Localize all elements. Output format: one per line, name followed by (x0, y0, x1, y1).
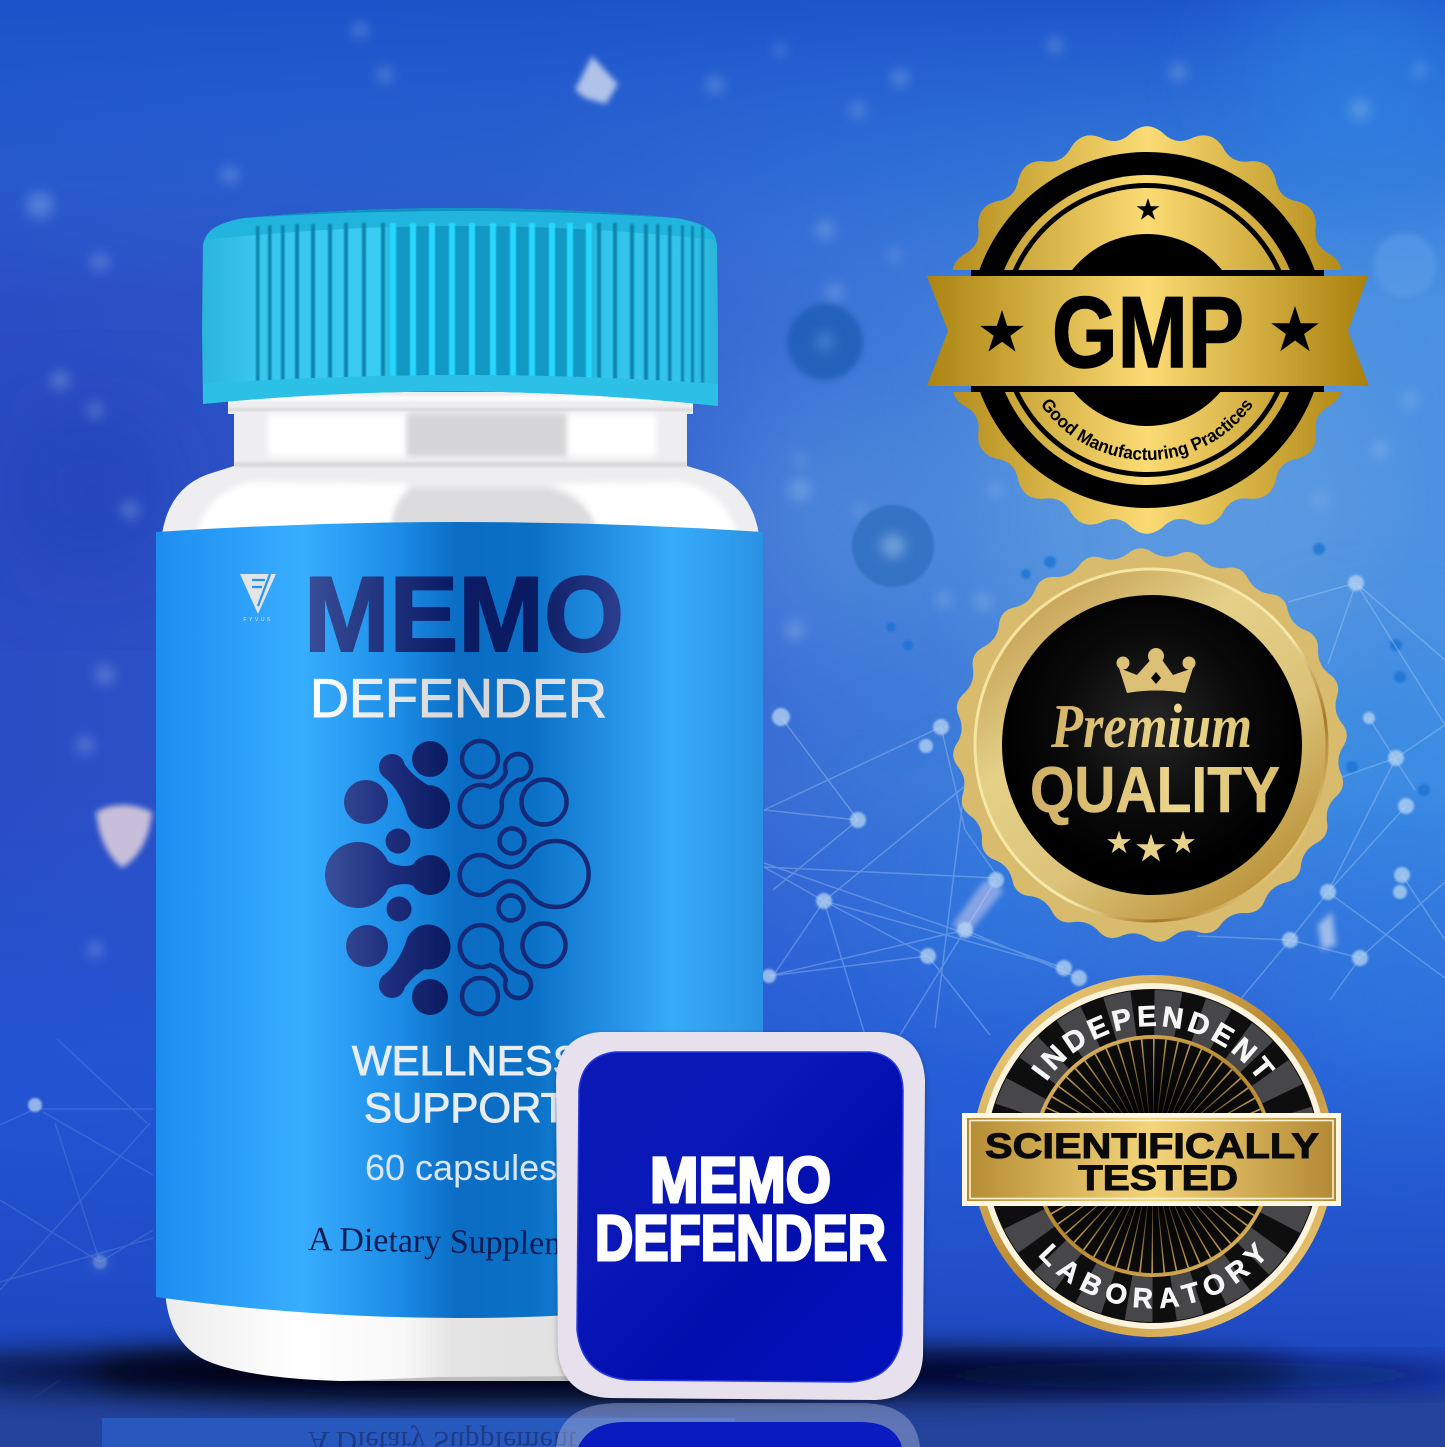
label text: dietary supplement: A Dietary Supplement (308, 1221, 613, 1263)
light shards (96, 56, 1336, 950)
reflection of bottle and box on the floor (102, 1403, 920, 1447)
decorative side grooves (256, 223, 704, 383)
box frame (556, 1032, 925, 1400)
badge: independent laboratory (962, 975, 1341, 1337)
decorative center ribs (390, 223, 592, 380)
product: supplement bottle (150, 208, 770, 1381)
product: blister pack box (556, 1032, 925, 1400)
GMP heading: GMP (1052, 277, 1244, 389)
dark blurred spheres (787, 233, 1437, 587)
curved caption: Good Manufacturing Practices (1042, 400, 1252, 460)
label text: capsule count: 60 capsules (365, 1147, 557, 1188)
bottle label (156, 522, 763, 1318)
badge seal body (943, 126, 1351, 534)
network lines and nodes (0, 575, 1445, 1420)
icon: molecular brain, filled half (325, 741, 450, 1015)
badge: GMP (927, 126, 1369, 534)
script word: Premium: Premium (1050, 693, 1252, 761)
label text: support: SUPPORT (364, 1084, 566, 1131)
label text: wellness: WELLNESS (352, 1037, 581, 1084)
ring text: LABORATORY: LABORATORY (1038, 1241, 1264, 1309)
banner text: SCIENTIFICALLY: SCIENTIFICALLY (985, 1127, 1319, 1166)
word: QUALITY: QUALITY (1030, 753, 1280, 826)
banner text: TESTED: TESTED (1078, 1159, 1238, 1198)
bottle base (165, 1290, 620, 1381)
seal body (943, 538, 1357, 952)
bottle neck and shoulder (162, 392, 758, 532)
ribbon star left (980, 310, 1024, 352)
brand logo: FYVUS: FYVUS (243, 617, 273, 623)
crown icon (1116, 648, 1196, 693)
seal ring (972, 975, 1334, 1337)
product name: MEMO: MEMO (304, 554, 624, 674)
floor shadow and reflection zone (0, 1350, 1445, 1447)
ring text: INDEPENDENT: INDEPENDENT (1031, 1006, 1276, 1081)
product name: DEFENDER: DEFENDER (310, 667, 607, 729)
ribbon (927, 276, 1369, 386)
brand logo: FYVUS (240, 574, 276, 623)
box panel (577, 1052, 903, 1382)
ribbon star right (1271, 306, 1319, 351)
three stars (1107, 830, 1195, 862)
sunburst rays (1035, 1038, 1271, 1274)
icon: molecular brain, outlined half (460, 741, 589, 1014)
box title: DEFENDER: DEFENDER (595, 1202, 886, 1274)
bottle cap (202, 208, 718, 406)
banner (962, 1113, 1341, 1206)
small dark blue specks (886, 543, 1430, 796)
top star (1137, 198, 1159, 220)
badge: premium quality (943, 538, 1357, 952)
box title: MEMO: MEMO (650, 1144, 831, 1216)
